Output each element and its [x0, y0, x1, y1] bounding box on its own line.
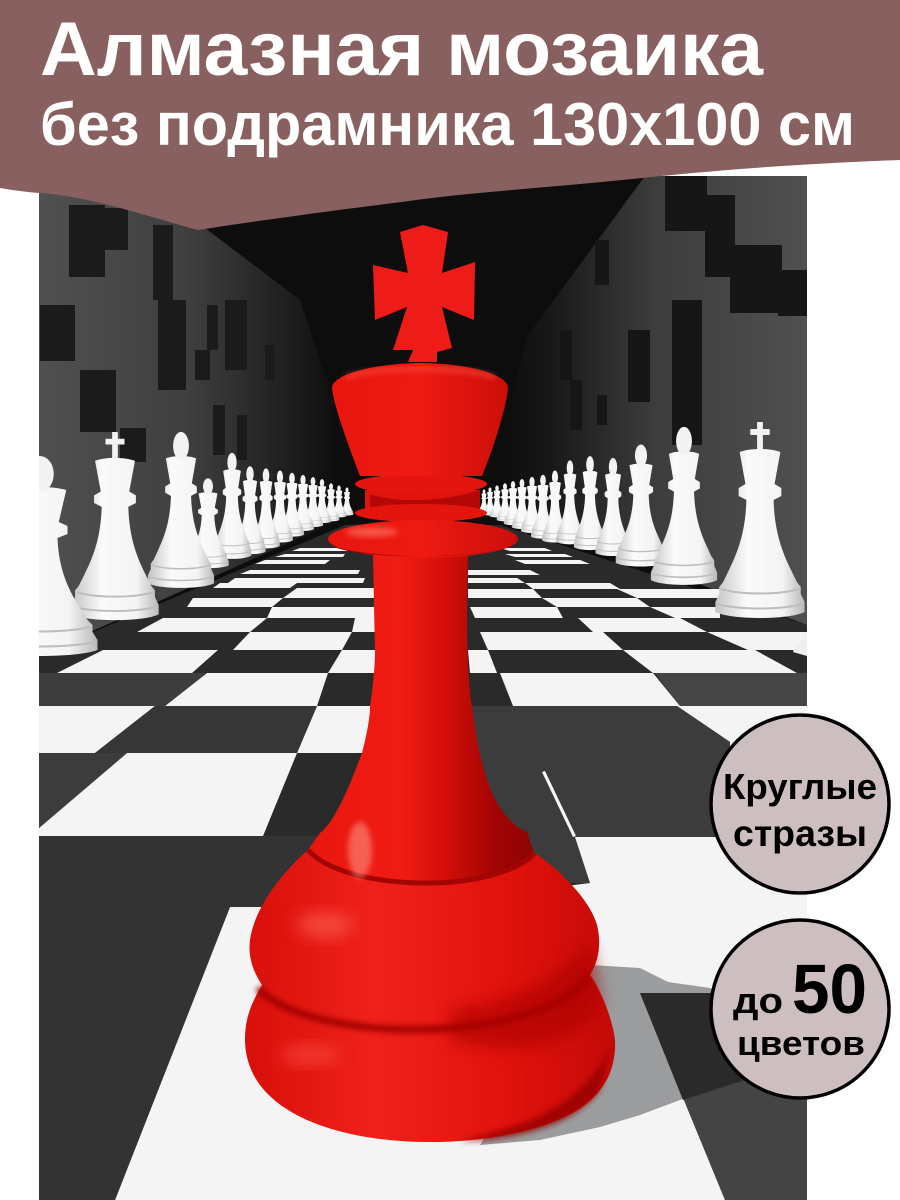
king stem [300, 555, 540, 900]
badge: up to 50 colours: до [733, 980, 783, 1021]
badge: up to 50 colours: 50 [792, 950, 867, 1028]
left wall [39, 193, 316, 631]
king crown [332, 363, 508, 476]
king cast shadow [480, 965, 807, 1200]
dark corridor background [92, 190, 807, 632]
chess photo [0, 176, 807, 1200]
white chess pieces right row [478, 422, 807, 656]
red chess king [245, 225, 615, 1142]
white chess pieces left row [39, 432, 354, 656]
header ribbon [0, 0, 900, 230]
tile shading [460, 706, 730, 883]
king base [245, 822, 615, 1142]
king cross [373, 225, 475, 362]
badge: up to 50 colours: цветов [737, 1025, 865, 1063]
right wall [538, 176, 807, 625]
title: Алмазная мозаика [40, 7, 764, 92]
badge: round rhinestones: Круглые [723, 766, 877, 807]
king collar and rings [328, 474, 518, 558]
badge: up to 50 colours [711, 920, 889, 1098]
subtitle: без подрамника 130х100 см [40, 91, 855, 158]
white foreground floor tiles [115, 837, 807, 1200]
checkerboard floor [39, 525, 807, 1200]
badge: round rhinestones [711, 715, 889, 893]
badge: round rhinestones: стразы [733, 813, 867, 854]
